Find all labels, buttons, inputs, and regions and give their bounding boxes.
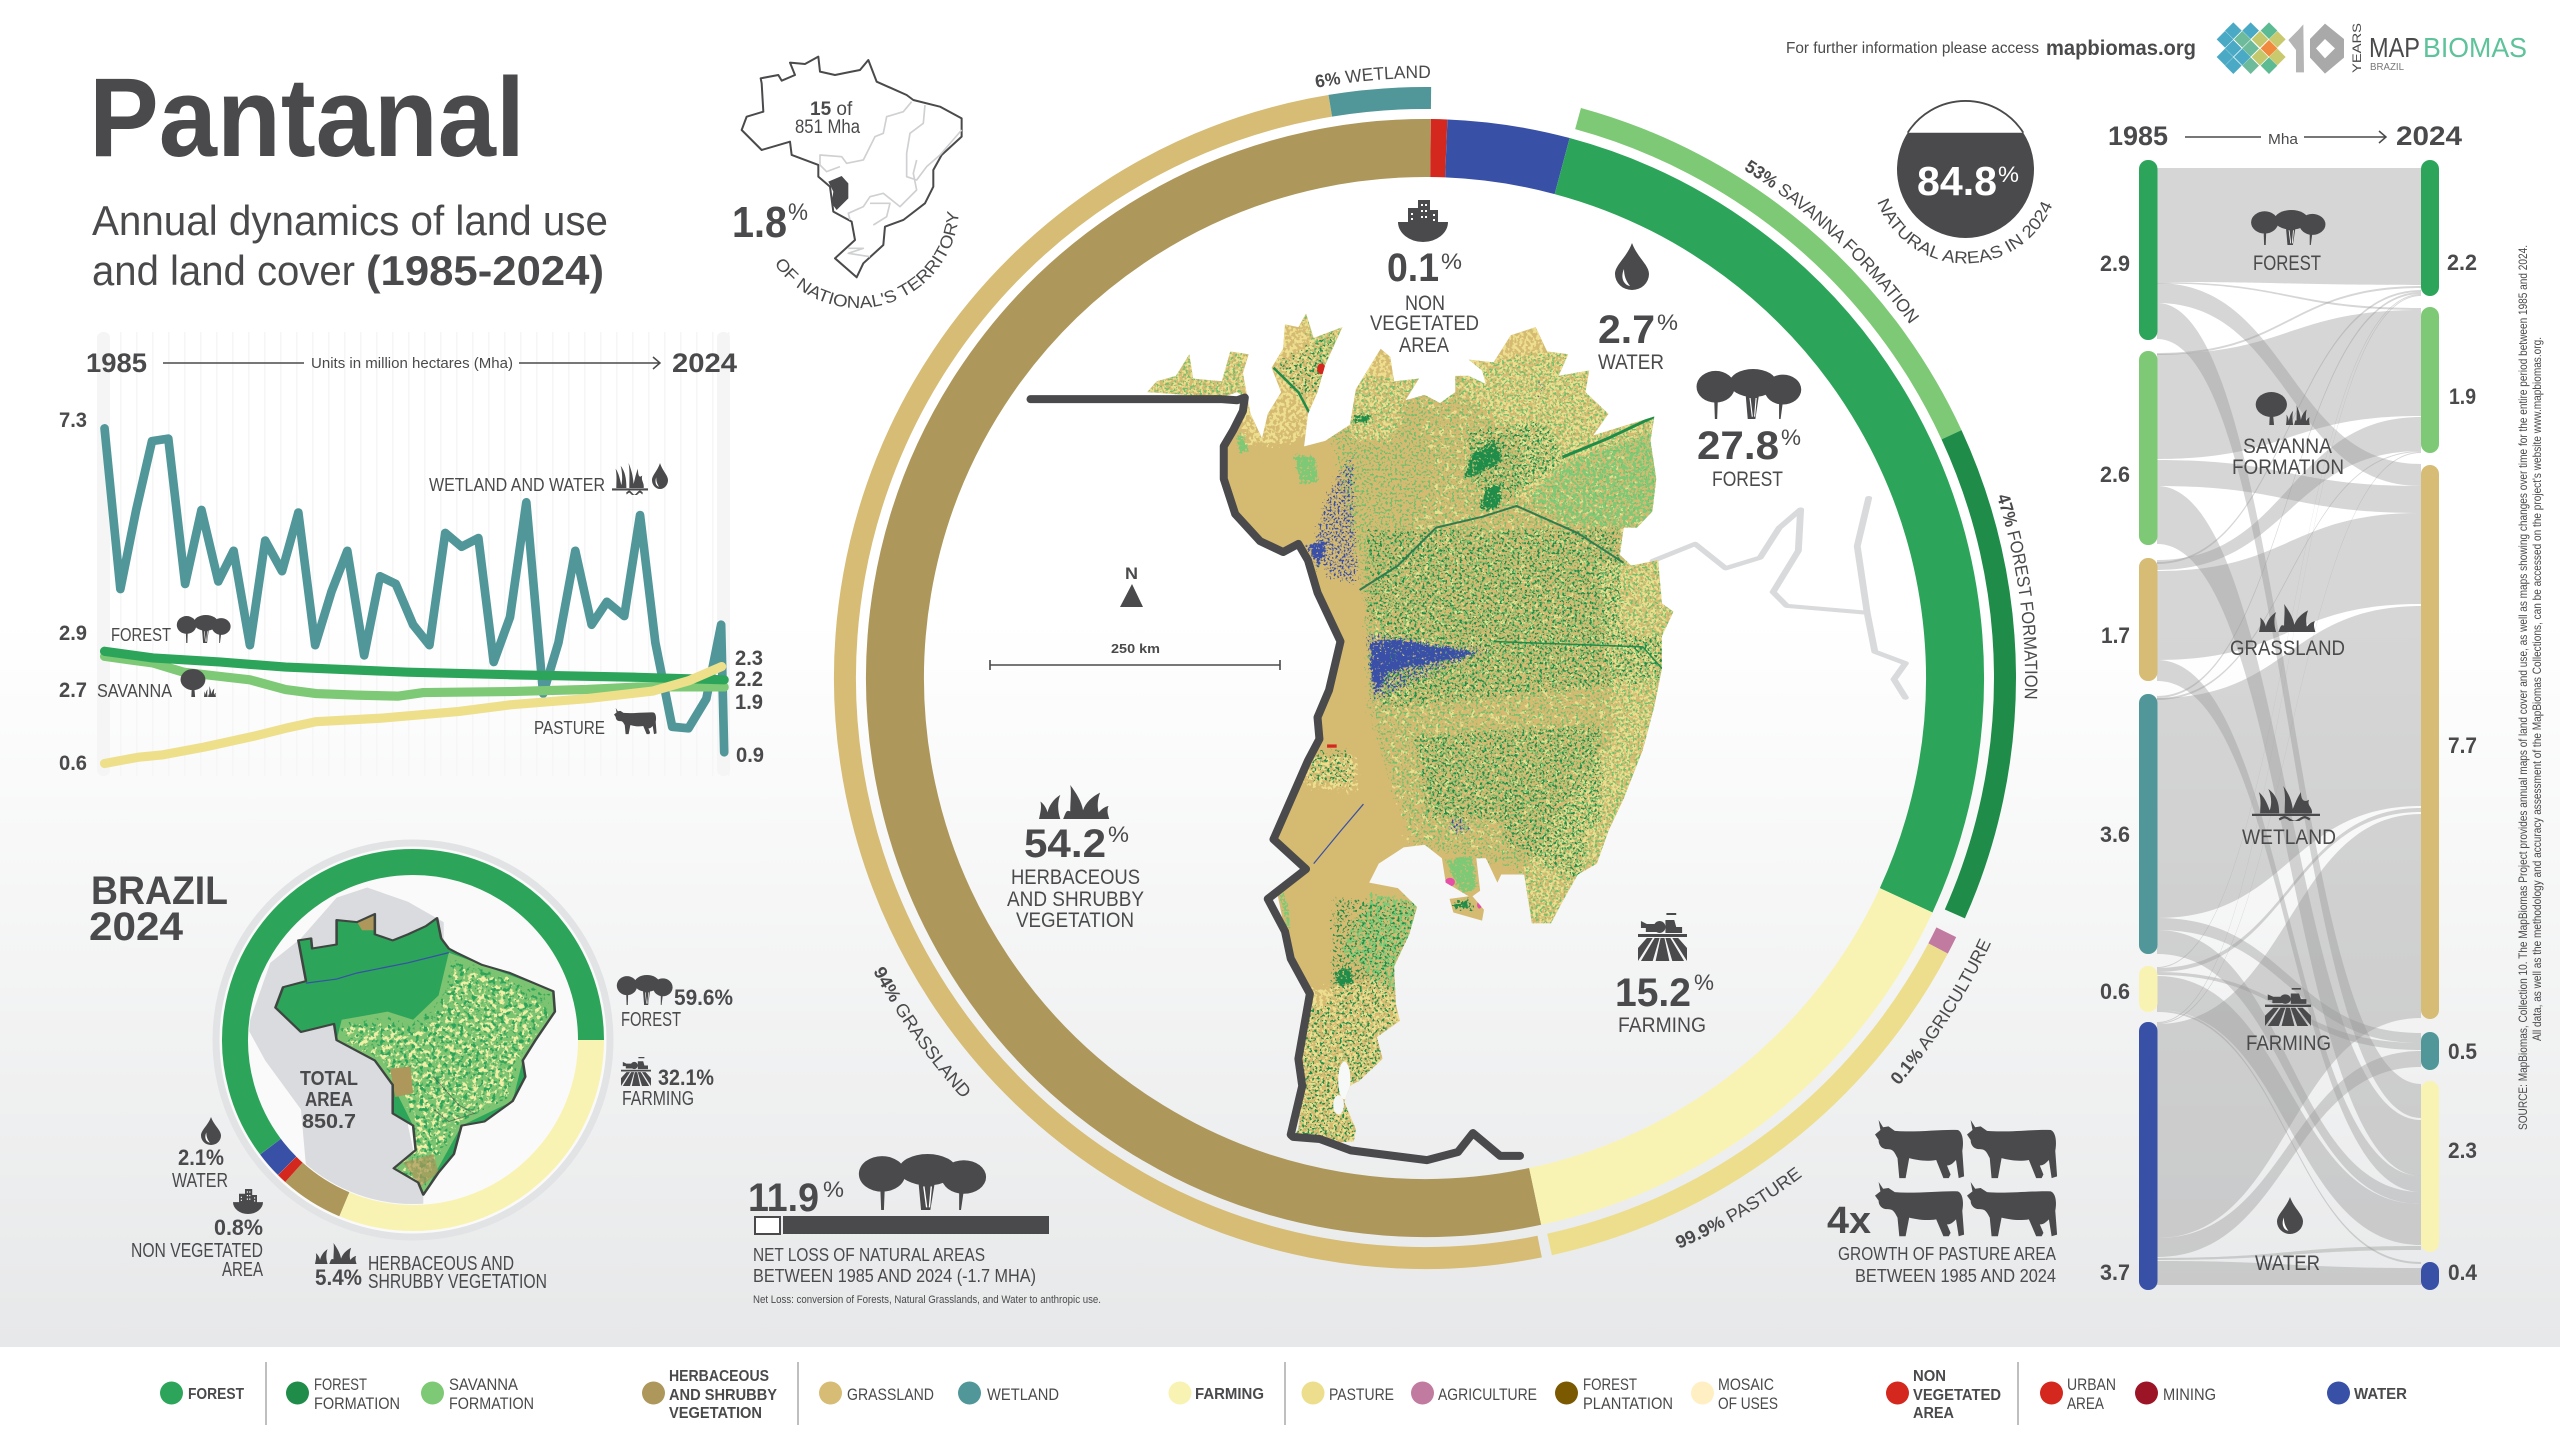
legend: herbaceous group: VEGETATION: [669, 1405, 762, 1422]
sankey class: savanna formation: SAVANNA: [2243, 435, 2332, 458]
sankey values 2024: 0.4: [2448, 1260, 2478, 1285]
sankey class: wetland: [2242, 786, 2336, 849]
stat: herbaceous and shrubby vegetation: %: [1108, 822, 1129, 847]
subtitle: and land cover: [92, 247, 355, 294]
stat: non vegetated area: [1370, 200, 1479, 357]
sankey values 1985: 0.6: [2100, 979, 2130, 1004]
sankey class: forest: [2251, 210, 2325, 275]
heading: Brazil 2024: [89, 869, 228, 949]
label: herbaceous 5.4%: 5.4%: [315, 1265, 362, 1290]
sankey class: forest: FOREST: [2253, 252, 2321, 275]
stat: farming: %: [1694, 970, 1714, 995]
line: forest: [105, 651, 724, 680]
north arrow: [1120, 564, 1143, 607]
label: non vegetated 0.8%: [131, 1189, 263, 1281]
legend: non vegetated group: AREA: [1913, 1405, 1954, 1422]
stat: forest: 27.8: [1697, 424, 1779, 468]
label: forest 59.6%: 59.6%: [674, 985, 733, 1010]
legend: farming group: OF USES: [1718, 1394, 1778, 1413]
panel: sankey transitions diagram: [2100, 121, 2478, 1290]
sankey header: Mha: [2268, 131, 2299, 148]
sankey class: grassland: GRASSLAND: [2230, 637, 2345, 660]
legend: herbaceous group: GRASSLAND: [847, 1385, 934, 1404]
further information link: [1786, 37, 2196, 60]
sankey class: savanna formation: FORMATION: [2232, 456, 2344, 479]
stat: 1.8%: %: [788, 199, 808, 226]
stat: non vegetated area: 0.1: [1387, 246, 1439, 290]
sankey class: farming: FARMING: [2246, 1032, 2331, 1055]
legend: farming group: FOREST: [1583, 1375, 1637, 1394]
line: wetland and water: [105, 428, 724, 752]
sankey values 2024: 2.3: [2448, 1138, 2477, 1163]
series labels and icons: FOREST: [111, 625, 171, 645]
label: water 2.1%: WATER: [172, 1170, 228, 1192]
legend: non vegetated group: AREA: [2067, 1394, 2105, 1413]
legend: [160, 1362, 2407, 1425]
chart values: 2.7: [59, 679, 87, 702]
legend: forest group: FORMATION: [314, 1394, 400, 1413]
stat: non vegetated area: NON: [1405, 292, 1445, 315]
callout: natural areas in 2024: NATURAL AREAS IN 2024: [1878, 198, 2052, 264]
ring labels: 47% FOREST FORMATION: [1998, 495, 2038, 698]
series labels and icons: SAVANNA: [97, 681, 172, 701]
series labels and icons: WETLAND AND WATER: [429, 475, 605, 495]
logo: MapBiomas 10 years: BRAZIL: [2370, 62, 2404, 73]
chart values: 2.2: [735, 668, 763, 691]
stat: water: [1598, 243, 1678, 374]
sankey header: 1985: [2108, 121, 2168, 151]
stat: farming: 15.2: [1615, 971, 1691, 1015]
legend: herbaceous group: WETLAND: [987, 1385, 1059, 1404]
sankey values 2024: [2447, 250, 2478, 1285]
legend: herbaceous group: AND SHRUBBY: [669, 1387, 777, 1404]
curved caption: OF NATIONAL'S TERRITORY: [776, 211, 958, 308]
callout: natural areas in 2024: [1878, 100, 2052, 264]
sankey header: 2024: [2396, 121, 2462, 151]
legend: farming group: AGRICULTURE: [1438, 1385, 1537, 1404]
sankey class: water: WATER: [2255, 1252, 2320, 1275]
legend: non vegetated group: MINING: [2163, 1385, 2216, 1404]
ring labels: 53% SAVANNA FORMATION: [1745, 160, 1920, 324]
logo: MapBiomas 10 years: [2217, 22, 2527, 74]
legend: forest group: [160, 1375, 534, 1413]
outer ring: sub classes: [641, 0, 2209, 1438]
label: water 2.1%: 2.1%: [178, 1145, 224, 1170]
legend: herbaceous group: [642, 1368, 1059, 1422]
sankey bars 1985: [2139, 160, 2158, 1290]
source note: SOURCE: MapBiomas, Collection 10. The MapBiomas Project provides annual maps of land cover and use, as well as maps showing changes over time for the entire period between 1985 and 2024.: [2516, 245, 2530, 1130]
15 of 851 Mha: 851 Mha: [795, 117, 860, 138]
15 of 851 Mha: [795, 99, 860, 138]
series labels and icons: PASTURE: [534, 718, 605, 738]
total area: 850.7: [302, 1111, 356, 1133]
ring labels: 94% GRASSLAND: [874, 967, 970, 1096]
legend: farming group: PASTURE: [1329, 1385, 1394, 1404]
legend: non vegetated group: [1886, 1368, 2216, 1422]
chart values: [59, 409, 764, 775]
stat: water: 2.7: [1598, 308, 1655, 352]
chart values: 2.3: [735, 647, 763, 670]
label: herbaceous 5.4%: [315, 1243, 547, 1293]
sankey values 2024: 1.9: [2449, 384, 2476, 409]
legend: non vegetated group: URBAN: [2067, 1375, 2116, 1394]
stat: water: WATER: [1598, 351, 1664, 374]
chart header: 2024: [672, 348, 737, 378]
stat: non vegetated area: AREA: [1399, 334, 1449, 357]
total area: [300, 1068, 358, 1133]
small map of Brazil: [742, 57, 962, 277]
label: farming 32.1%: FARMING: [622, 1088, 694, 1110]
legend: non vegetated group: VEGETATED: [1913, 1387, 2001, 1404]
source note: All data, as well as the methodology and accuracy assessment of the MapBiomas Collections, can be accessed on the project's website www.mapbiomas.org.: [2530, 337, 2544, 1041]
callout: growth of pasture area: [1827, 1120, 2057, 1286]
further information link: For further information please access: [1786, 40, 2039, 57]
sankey values 2024: 2.2: [2447, 250, 2477, 275]
legend: farming group: PLANTATION: [1583, 1394, 1673, 1413]
stat: herbaceous and shrubby vegetation: AND SHRUBBY: [1007, 888, 1144, 911]
chart values: 0.6: [59, 752, 87, 775]
heading: Brazil 2024: 2024: [89, 905, 184, 949]
legend: herbaceous group: HERBACEOUS: [669, 1368, 769, 1385]
logo: MapBiomas 10 years: YEARS: [2350, 23, 2364, 73]
stat: forest: FOREST: [1712, 468, 1783, 491]
subtitle: (1985-2024): [366, 247, 604, 294]
sankey values 1985: 3.7: [2100, 1260, 2130, 1285]
ring labels: 99.9% PASTURE: [1676, 1166, 1802, 1248]
stat: water: %: [1657, 310, 1678, 335]
source note: [2516, 245, 2544, 1130]
callout: net loss of natural areas: Net Loss: conversion of Forests, Natural Grasslands, and Water to anthropic use.: [753, 1294, 1101, 1306]
total area: AREA: [305, 1089, 353, 1111]
legend: non vegetated group: NON: [1913, 1368, 1946, 1385]
legend: forest group: SAVANNA: [449, 1375, 519, 1394]
legend: water: [2327, 1382, 2407, 1404]
sankey class: grassland: [2230, 604, 2345, 660]
stat: farming: FARMING: [1618, 1014, 1706, 1037]
legend: farming group: MOSAIC: [1718, 1375, 1774, 1394]
panel: time series line chart: [59, 332, 764, 776]
callout: natural areas in 2024: 84.8: [1917, 158, 1997, 204]
label: non vegetated 0.8%: 0.8%: [214, 1215, 263, 1240]
callout: net loss of natural areas: 11.9: [748, 1176, 819, 1220]
heading: Brazil 2024: BRAZIL: [91, 869, 228, 913]
sankey values 1985: 2.9: [2100, 251, 2130, 276]
label: forest 59.6%: FOREST: [621, 1009, 681, 1031]
chart header: Units in million hectares (Mha): [311, 355, 513, 372]
scale bar: 250 km: [1111, 641, 1160, 656]
label: water 2.1%: [172, 1117, 228, 1192]
legend: farming group: FARMING: [1195, 1386, 1264, 1403]
stat: herbaceous and shrubby vegetation: 54.2: [1024, 822, 1106, 866]
stat: farming: [1615, 913, 1714, 1037]
label: non vegetated 0.8%: NON VEGETATED: [131, 1240, 263, 1262]
subtitle: [92, 197, 608, 294]
ring labels: 0.1% AGRICULTURE: [1891, 938, 1991, 1084]
further information link: mapbiomas.org: [2046, 37, 2196, 60]
callout: net loss of natural areas: NET LOSS OF NATURAL AREAS: [753, 1245, 985, 1265]
15 of 851 Mha: 15 of: [810, 99, 853, 120]
callout: natural areas in 2024: %: [1998, 162, 2019, 187]
panel: central ring and Pantanal map: [834, 66, 2038, 1270]
stat: herbaceous and shrubby vegetation: [1007, 785, 1144, 932]
legend: water: WATER: [2354, 1386, 2407, 1403]
grey rivers outside the biome: [1653, 498, 1905, 698]
sankey class: savanna formation: [2232, 392, 2344, 479]
sankey class: water: [2255, 1197, 2320, 1275]
north arrow: N: [1125, 564, 1138, 583]
sankey values 1985: 2.6: [2100, 462, 2130, 487]
label: farming 32.1%: [621, 1057, 714, 1110]
label: herbaceous 5.4%: SHRUBBY VEGETATION: [368, 1271, 547, 1293]
total area: TOTAL: [300, 1068, 358, 1090]
chart values: 1.9: [735, 691, 763, 714]
sankey bars 2024: [2421, 160, 2439, 1290]
stat: herbaceous and shrubby vegetation: HERBACEOUS: [1011, 866, 1140, 889]
callout: growth of pasture area: BETWEEN 1985 AND 2024: [1855, 1266, 2056, 1286]
sankey values 1985: [2100, 251, 2130, 1285]
stat: non vegetated area: VEGETATED: [1370, 312, 1479, 335]
sankey class: farming: [2246, 988, 2331, 1055]
stat: 1.8%: 1.8: [732, 198, 787, 247]
chart header: 1985: [86, 348, 147, 378]
logo: MapBiomas 10 years: BIOMAS: [2423, 32, 2527, 63]
label: farming 32.1%: 32.1%: [658, 1065, 714, 1090]
series labels and icons: [97, 463, 668, 738]
label: forest 59.6%: [617, 975, 733, 1031]
panel: Brazil 2024: [90, 840, 732, 1288]
sankey values 1985: 3.6: [2100, 822, 2130, 847]
stat: non vegetated area: %: [1441, 249, 1462, 274]
callout: net loss of natural areas: [748, 1154, 1101, 1306]
callout: growth of pasture area: GROWTH OF PASTURE AREA: [1838, 1244, 2056, 1264]
title: Pantanal: [89, 55, 525, 180]
subtitle: Annual dynamics of land use: [92, 197, 608, 244]
ring labels: [874, 66, 2038, 1248]
sankey header: [2108, 121, 2462, 151]
biome border: [1030, 398, 1520, 1160]
sankey values 2024: 0.5: [2448, 1039, 2477, 1064]
sankey flows: [2157, 168, 2421, 1285]
callout: net loss of natural areas: %: [823, 1177, 844, 1202]
stat: forest: %: [1781, 425, 1801, 450]
sankey values 2024: 7.7: [2448, 733, 2477, 758]
scale bar: [990, 641, 1280, 670]
logo: MapBiomas 10 years: MAP: [2369, 32, 2420, 63]
stat: forest: [1697, 369, 1801, 491]
sankey class: wetland: WETLAND: [2242, 826, 2336, 849]
legend: forest group: FOREST: [188, 1386, 244, 1403]
panel: share of national territory: [732, 56, 963, 308]
chart header: [86, 348, 737, 378]
chart values: 2.9: [59, 622, 87, 645]
chart values: 0.9: [736, 744, 764, 767]
legend: forest group: FORMATION: [449, 1394, 534, 1413]
callout: net loss of natural areas: BETWEEN 1985 AND 2024 (-1.7 MHA): [753, 1266, 1036, 1286]
line: savanna: [105, 656, 724, 696]
legend: forest group: FOREST: [314, 1375, 367, 1394]
stat: herbaceous and shrubby vegetation: VEGETATION: [1016, 909, 1134, 932]
line: pasture: [105, 667, 722, 763]
chart values: 7.3: [59, 409, 87, 432]
legend: farming group: [1168, 1375, 1778, 1413]
callout: growth of pasture area: 4x: [1827, 1200, 1871, 1242]
label: non vegetated 0.8%: AREA: [222, 1259, 263, 1281]
ring labels: 6% WETLAND: [1316, 66, 1430, 88]
Pantanal land cover map: [1026, 314, 1674, 1164]
label: herbaceous 5.4%: HERBACEOUS AND: [368, 1253, 514, 1275]
inner ring: land cover classes: [722, 0, 2128, 1381]
donut chart and map of Brazil: [212, 840, 614, 1240]
sankey values 1985: 1.7: [2101, 623, 2130, 648]
